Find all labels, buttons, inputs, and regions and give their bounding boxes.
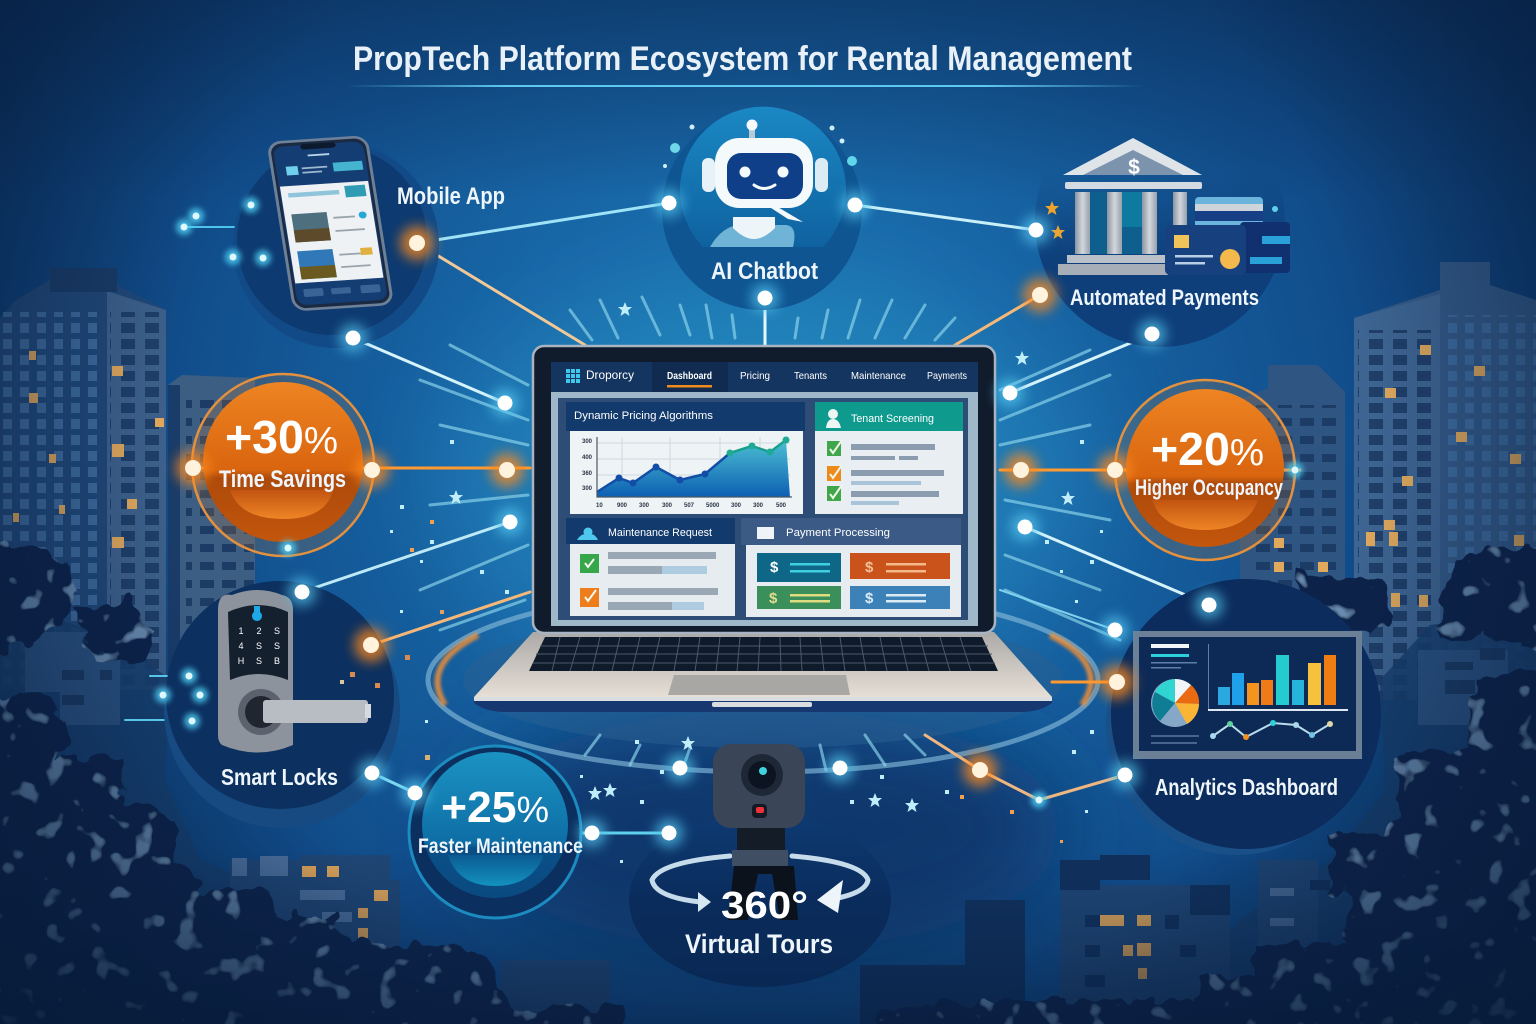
panel: AI chatbot [662, 107, 862, 310]
icon: bank [1058, 138, 1202, 275]
navigation bar: Droporcy [586, 368, 634, 382]
line chart: 500 [776, 503, 787, 509]
line chart [582, 436, 792, 509]
panel: maintenance request [566, 518, 735, 616]
icon: smart lock: H [238, 656, 244, 666]
line chart: 300 [582, 486, 593, 492]
pie chart [1151, 679, 1199, 727]
stat badge: higher occupancy [1115, 380, 1295, 560]
panel: smart locks [164, 581, 400, 828]
navigation bar: Payments [927, 370, 967, 382]
value: 360 degrees: 360° [721, 885, 808, 927]
line chart: 360 [582, 471, 593, 477]
icon: smart lock: S [256, 641, 262, 651]
line chart: 300 [582, 439, 593, 445]
panel: tenant screening: Tenant Screening [851, 413, 934, 425]
line chart: 300 [639, 503, 650, 509]
orbit ring around laptop [428, 588, 1098, 772]
icon: robot [663, 120, 857, 247]
network nodes [155, 189, 1303, 847]
panel: payment processing: Payment Processing [786, 527, 890, 539]
label: automated payments: Automated Payments [1070, 285, 1259, 310]
line chart: 10 [596, 503, 603, 509]
icon: smart lock: 4 [238, 641, 244, 651]
radiating rays [420, 297, 1120, 770]
laptop [474, 346, 1052, 712]
laptop base [474, 632, 1052, 712]
icon: smart lock: 2 [256, 626, 262, 636]
icon: smart lock: 1 [238, 626, 244, 636]
dashboard screen [551, 362, 978, 626]
panel: dynamic pricing [566, 402, 805, 514]
panel: mobile app [233, 136, 505, 348]
line chart: 5000 [706, 503, 720, 509]
title: PropTech Platform Ecosystem for Rental Management [353, 40, 1132, 78]
panel: payment processing: $ [865, 559, 874, 576]
panel: tenant screening [815, 402, 963, 514]
bar chart [1208, 644, 1348, 711]
label: smart locks: Smart Locks [221, 764, 338, 790]
icon: camera [713, 744, 805, 920]
panel: payment processing: $ [769, 590, 778, 607]
icon: smart lock: S [256, 656, 262, 666]
label: virtual tours: Virtual Tours [685, 929, 833, 959]
icon: bank: $ [1128, 156, 1140, 179]
panel: payment processing: $ [865, 590, 874, 607]
icon: analytics monitor [1133, 631, 1362, 759]
panel: dynamic pricing: Dynamic Pricing Algorithms [574, 410, 714, 422]
sparkle particles [340, 302, 1103, 863]
line chart: 400 [582, 455, 593, 461]
navigation bar [551, 362, 978, 392]
icon: credit cards [1165, 197, 1290, 275]
label: mobile app: Mobile App [397, 183, 505, 210]
panel: payment processing [741, 518, 961, 617]
connector lines [125, 203, 1300, 833]
icon: phone [268, 136, 393, 310]
panel: 360 virtual tours [629, 744, 891, 987]
label: AI chatbot: AI Chatbot [711, 258, 818, 285]
icon: rotate arrows [652, 856, 868, 913]
line chart [1210, 720, 1333, 740]
laptop screen bezel [533, 346, 995, 633]
line chart: 507 [684, 503, 695, 509]
line chart: 300 [731, 503, 742, 509]
line chart: 900 [617, 503, 628, 509]
panel: maintenance request: Maintenance Request [608, 527, 712, 539]
label: time savings: Time Savings [219, 466, 346, 493]
stat badge: time savings [192, 374, 374, 556]
panel: payment processing: $ [770, 559, 779, 576]
icon: smart lock: S [274, 641, 280, 651]
panel: automated payments [1035, 97, 1290, 347]
label: faster maintenance: Faster Maintenance [418, 835, 583, 858]
icon: smart lock: B [274, 656, 280, 666]
skyline: right buildings [1240, 262, 1536, 700]
navigation bar: Tenants [794, 370, 827, 382]
label: analytics dashboard: Analytics Dashboard [1155, 774, 1338, 800]
icon: smart lock [218, 590, 371, 752]
stat badge: faster maintenance [409, 746, 583, 918]
value: +30%: +30% [225, 411, 338, 463]
label: higher occupancy: Higher Occupancy [1135, 475, 1284, 500]
navigation bar: Dashboard [667, 370, 712, 382]
navigation bar: Maintenance [851, 370, 906, 382]
line chart: 300 [662, 503, 673, 509]
panel: analytics dashboard [1106, 579, 1381, 855]
line chart: 300 [753, 503, 764, 509]
value: +25%: +25% [441, 783, 549, 832]
value: +20%: +20% [1151, 423, 1264, 475]
navigation bar: Pricing [740, 370, 770, 382]
skyline: left buildings [0, 268, 255, 690]
icon: smart lock: S [274, 626, 280, 636]
